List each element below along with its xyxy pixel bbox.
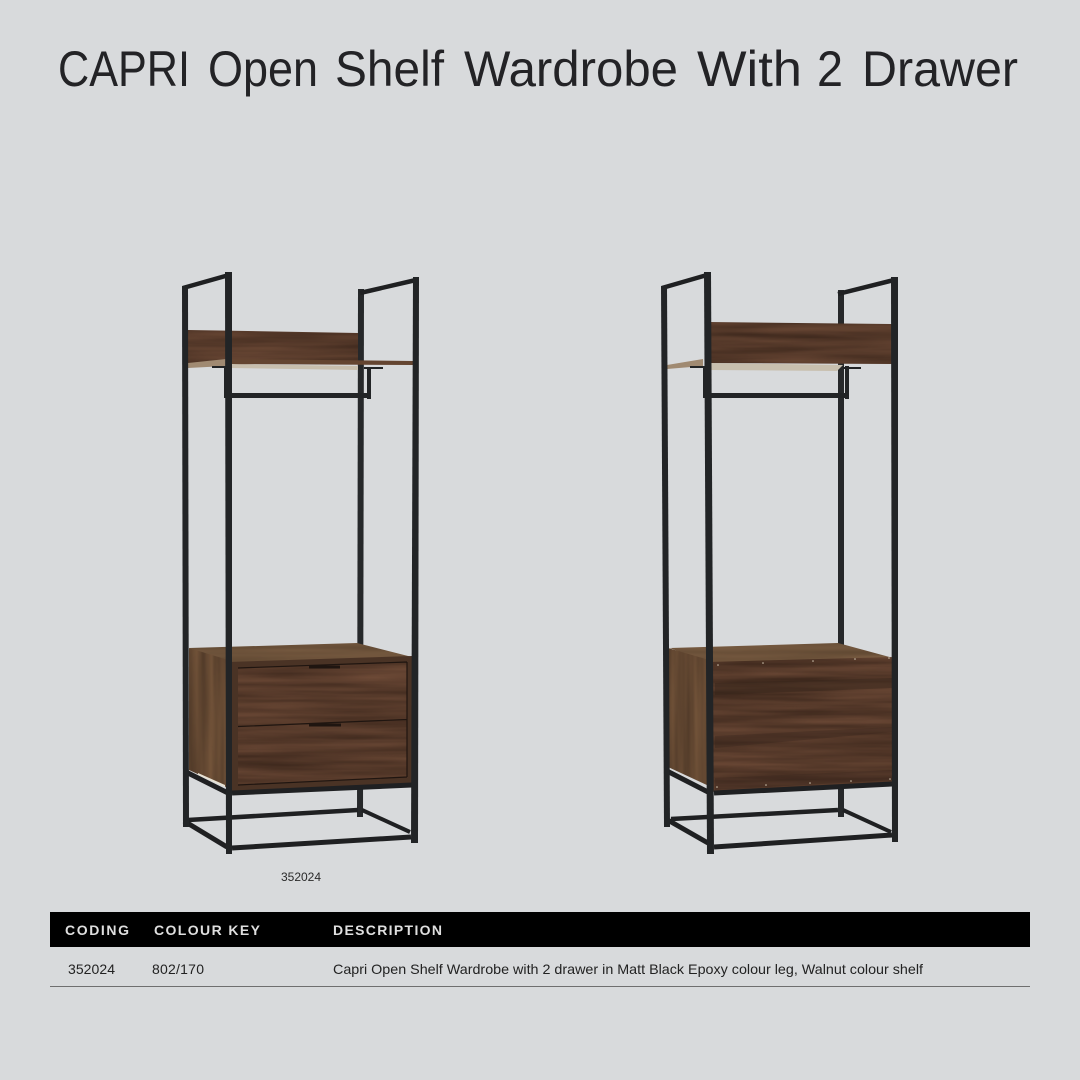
title: Open — [208, 41, 318, 97]
front frame posts — [661, 272, 898, 854]
table header bar — [50, 912, 1030, 947]
title: Drawer — [862, 41, 1018, 97]
column heading: coding: CODING — [65, 922, 129, 938]
title: Shelf — [335, 41, 444, 97]
metal frame rails — [183, 275, 416, 848]
row value: coding: 352024 — [68, 961, 115, 977]
bottom drawer — [238, 720, 407, 785]
title: With — [697, 41, 802, 97]
top drawer — [238, 662, 407, 726]
hanging rail — [690, 366, 861, 399]
drawer shadow lines and handles — [238, 662, 407, 785]
title — [58, 41, 1018, 97]
hanging rail — [212, 366, 383, 399]
product code caption: 352024 — [281, 870, 321, 884]
dark grain bands — [715, 678, 893, 695]
product image: wardrobe back view — [661, 272, 898, 854]
front frame posts — [182, 272, 419, 854]
open shelf with back panel — [188, 330, 413, 370]
drawer cabinet — [189, 643, 412, 791]
panel screws — [716, 657, 891, 788]
specification table — [50, 912, 1030, 987]
open shelf with back panel — [667, 322, 892, 371]
product image: wardrobe front view — [182, 272, 419, 854]
title: 2 — [817, 41, 843, 97]
column heading: description: DESCRIPTION — [333, 922, 442, 938]
title: Wardrobe — [464, 41, 678, 97]
row value: colour key: 802/170 — [152, 961, 204, 977]
column heading: colour key: COLOUR KEY — [154, 922, 261, 938]
title: CAPRI — [58, 41, 190, 97]
cabinet back panel — [668, 643, 893, 792]
metal frame rails — [662, 275, 894, 847]
rear frame posts — [838, 290, 844, 817]
row value: description: Capri Open Shelf Wardrobe with 2 drawer in Matt Black Epoxy colour leg, Walnut colour shelf — [333, 961, 923, 977]
rear frame posts — [357, 289, 364, 817]
table bottom rule — [50, 986, 1030, 987]
